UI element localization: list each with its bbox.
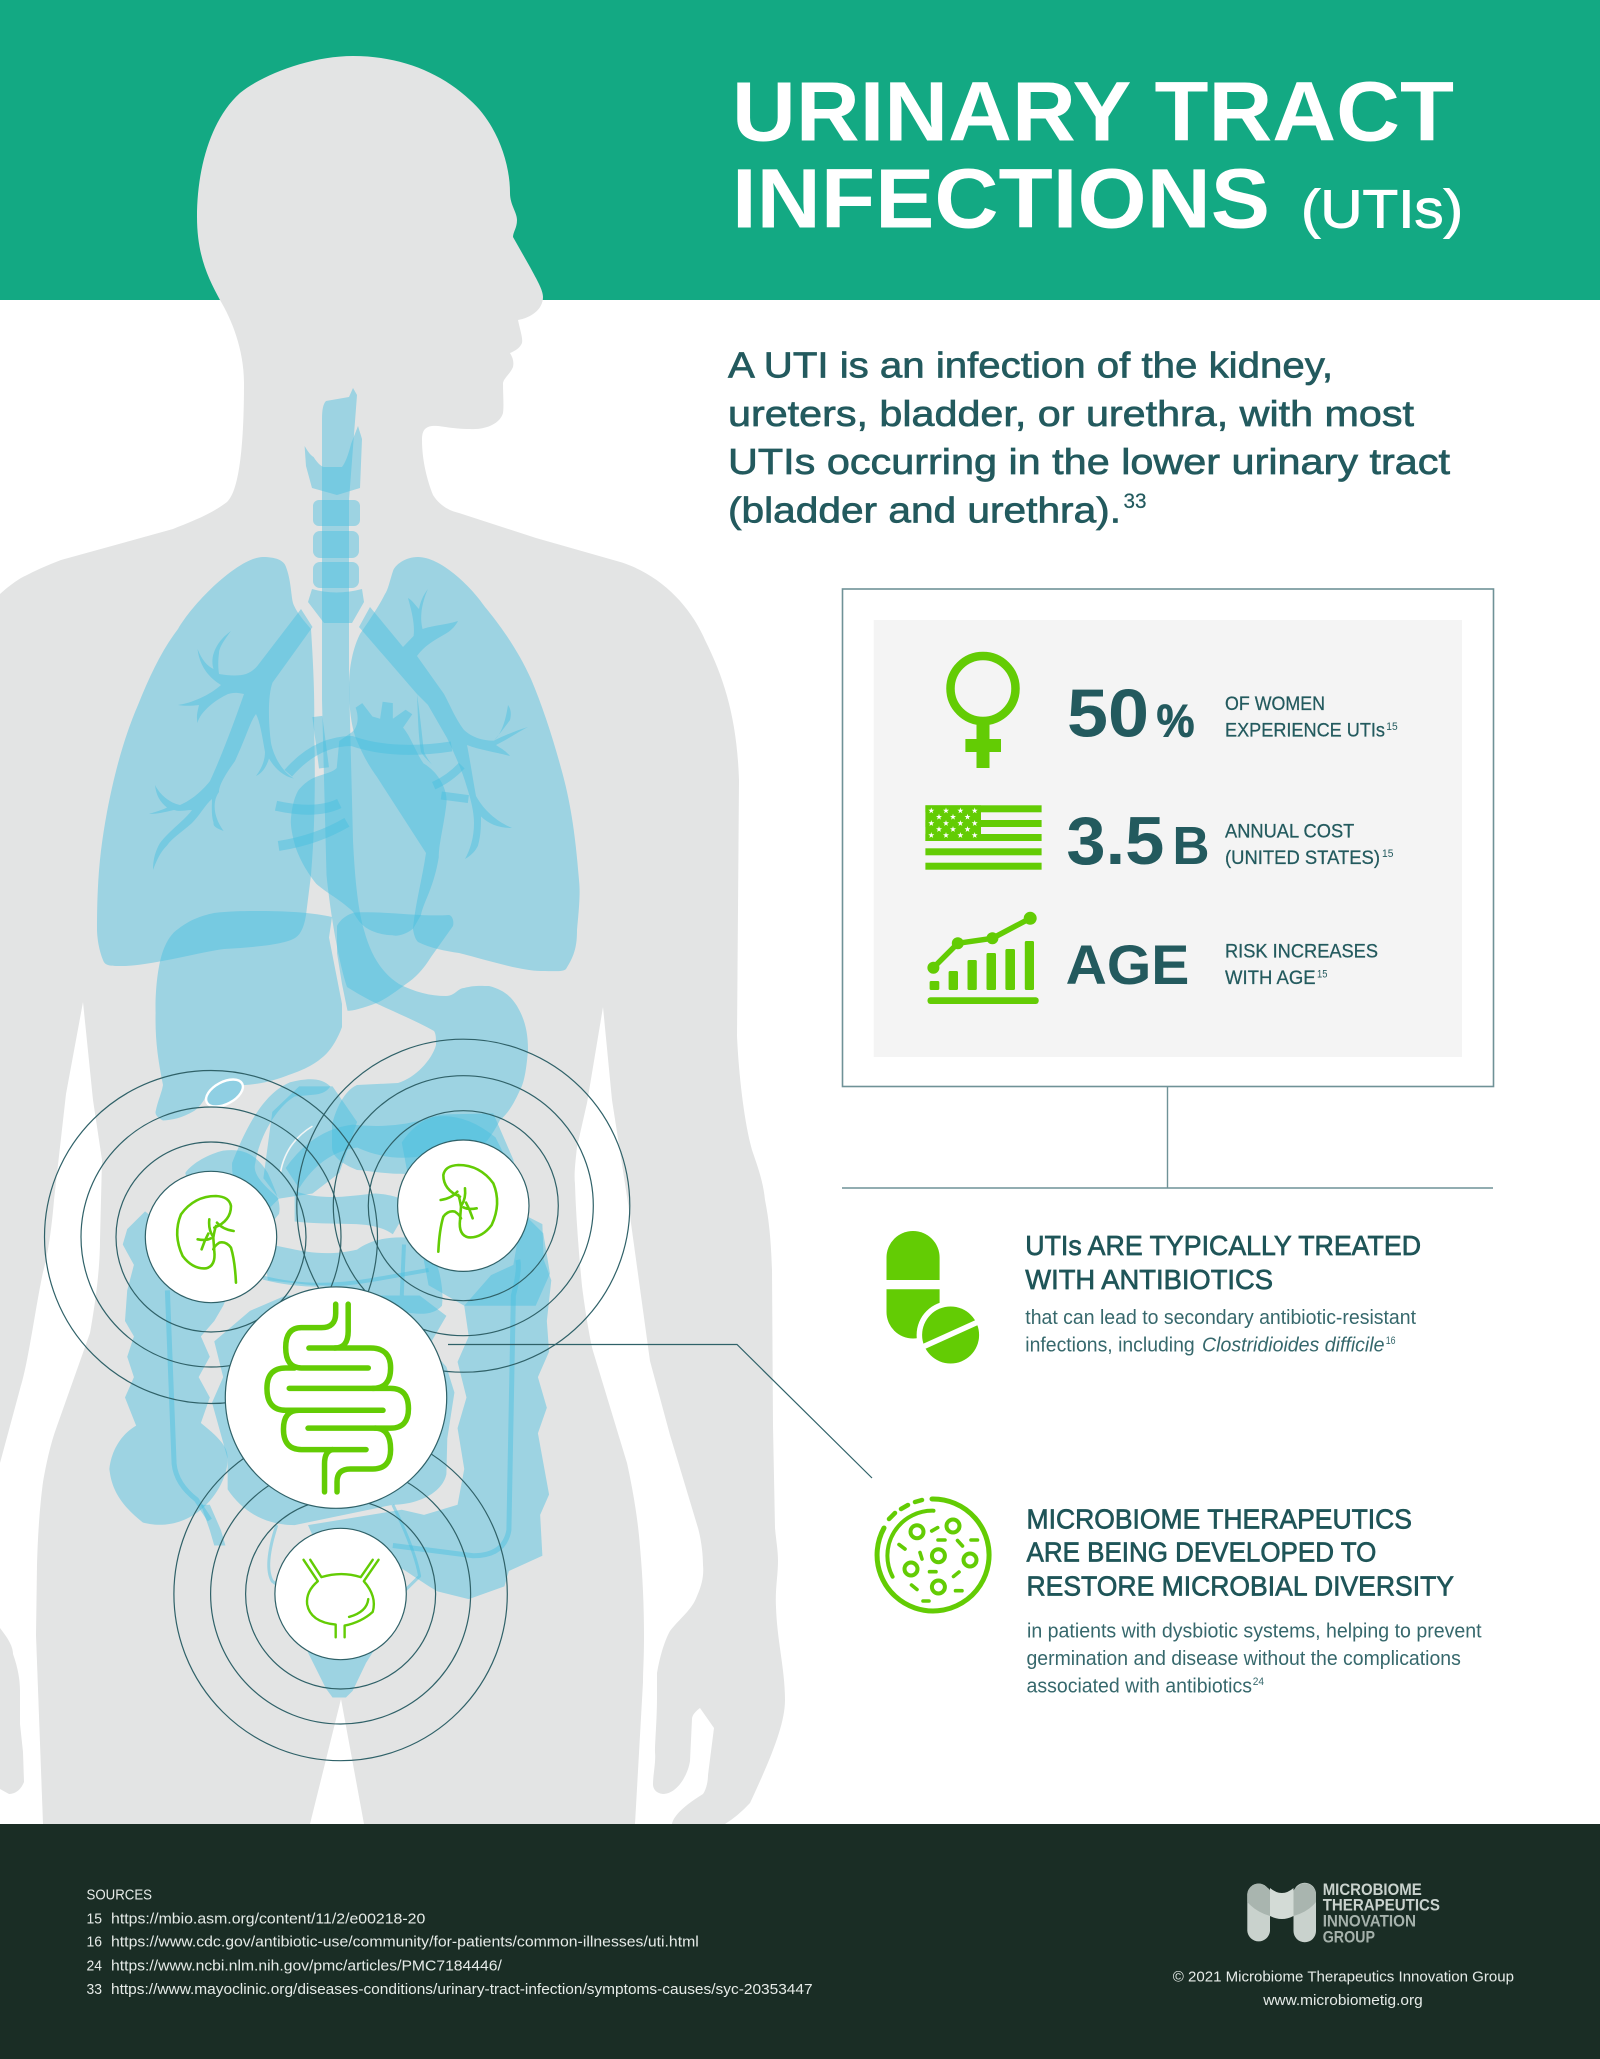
icon: bladder <box>304 1560 379 1637</box>
text: antibiotics <box>1025 1230 1421 1357</box>
inner duodenal loop <box>263 1086 357 1199</box>
stat: 3.5B: 3.5 <box>1066 803 1164 879</box>
text: antibiotics: UTIs ARE TYPICALLY TREATED <box>1025 1230 1421 1261</box>
panel: statistics <box>842 589 1494 1086</box>
website: www.microbiometig.org <box>1262 1992 1423 2009</box>
icon: intestine <box>267 1304 408 1492</box>
sources list: https://mbio.asm.org/content/11/2/e00218-20 <box>111 1910 425 1927</box>
connector line from intestine to microbiome <box>448 1344 872 1478</box>
left lung <box>97 557 315 966</box>
logo wordmark: INNOVATION <box>1323 1913 1416 1931</box>
stat: 50% <box>1067 676 1194 752</box>
panel frame <box>842 589 1494 1086</box>
label: risk increases: WITH AGE <box>1225 968 1316 989</box>
logo mark <box>1247 1883 1316 1942</box>
label: risk increases <box>1225 941 1378 989</box>
stat: AGE: AGE <box>1066 933 1189 996</box>
logo wordmark <box>1323 1881 1440 1946</box>
disc: right kidney <box>398 1140 529 1271</box>
organs: lungs, heart, digestive tract <box>97 388 580 1698</box>
intestines <box>109 1079 551 1698</box>
mesenteric vessels <box>167 1244 518 1591</box>
connector from panel to divider <box>842 1087 1493 1188</box>
sources list: SOURCES <box>86 1886 152 1903</box>
icon: pills <box>886 1231 985 1369</box>
copyright: © 2021 Microbiome Therapeutics Innovation Group <box>1173 1969 1514 1986</box>
icon: rising bar chart <box>927 912 1039 1004</box>
title <box>732 65 1463 245</box>
text: microbiome therapeutics <box>1026 1503 1482 1697</box>
text: microbiome therapeutics: MICROBIOME THERAPEUTICS <box>1026 1503 1412 1534</box>
label: risk increases: 15 <box>1317 969 1327 981</box>
pancreas <box>286 1116 513 1188</box>
left bronchi <box>149 609 312 870</box>
disc: left kidney <box>145 1171 277 1303</box>
header band <box>0 0 1600 300</box>
transverse colon <box>263 1237 442 1314</box>
small intestine <box>212 1296 454 1525</box>
text: microbiome therapeutics: RESTORE MICROBIAL DIVERSITY <box>1026 1571 1454 1602</box>
stat: 3.5B: B <box>1172 816 1210 876</box>
text: microbiome therapeutics: ARE BEING DEVELOPED TO <box>1026 1537 1376 1568</box>
heart <box>276 702 468 936</box>
sources list: 16 <box>86 1934 102 1951</box>
sources list: https://www.ncbi.nlm.nih.gov/pmc/articles/PMC7184446/ <box>111 1957 503 1974</box>
sources list <box>86 1886 813 1998</box>
right lung <box>349 557 580 971</box>
logo wordmark: GROUP <box>1323 1928 1375 1946</box>
sources list: 15 <box>86 1910 102 1927</box>
disc: bladder <box>275 1528 406 1660</box>
logo wordmark: THERAPEUTICS <box>1323 1897 1440 1915</box>
target rings and organ discs <box>44 1039 630 1761</box>
rings: right kidney <box>297 1039 630 1372</box>
descending colon <box>308 1214 551 1599</box>
splenic flexure <box>402 1113 550 1306</box>
intro paragraph: UTIs occurring in the lower urinary tract <box>728 441 1450 482</box>
logo wordmark: MICROBIOME <box>1323 1881 1422 1899</box>
sources list: 33 <box>86 1981 102 1998</box>
text: antibiotics: Clostridioides difficile <box>1202 1335 1384 1357</box>
label: of women: EXPERIENCE UTIs <box>1225 721 1385 742</box>
thyroid cartilage and tracheal rings <box>305 426 364 623</box>
right bronchi <box>359 589 528 859</box>
body silhouette <box>0 56 785 1824</box>
white arc inside duodenum <box>280 1126 312 1173</box>
label: risk increases: RISK INCREASES <box>1225 941 1378 962</box>
text: microbiome therapeutics: associated with antibiotics <box>1026 1675 1252 1697</box>
intro paragraph: ureters, bladder, or urethra, with most <box>728 393 1414 434</box>
text: antibiotics: 16 <box>1386 1335 1396 1347</box>
label: annual cost <box>1225 822 1393 869</box>
intro paragraph: 33 <box>1124 490 1146 513</box>
icon: left kidney <box>177 1196 236 1283</box>
right liver lobe <box>337 912 453 1011</box>
label: annual cost: 15 <box>1382 848 1393 860</box>
rings: bladder <box>174 1427 507 1761</box>
title: URINARY TRACT <box>732 65 1454 159</box>
footer band <box>0 1824 1600 2059</box>
stat: 50%: % <box>1156 695 1194 747</box>
gallbladder <box>202 1074 247 1112</box>
icon: microbe petri dish <box>877 1499 989 1611</box>
label: annual cost: (UNITED STATES) <box>1225 848 1380 869</box>
sources list: 24 <box>86 1957 102 1974</box>
trachea and oesophagus into stomach <box>322 388 528 1174</box>
label: of women <box>1225 694 1398 742</box>
text: antibiotics: infections, including <box>1025 1335 1195 1357</box>
title: (UTIs) <box>1301 179 1463 239</box>
text: antibiotics: that can lead to secondary antibiotic-resistant <box>1025 1307 1416 1329</box>
duodenum <box>232 1079 330 1210</box>
label: annual cost: ANNUAL COST <box>1225 822 1355 843</box>
icon: right kidney <box>438 1165 497 1252</box>
label: of women: 15 <box>1386 721 1398 733</box>
intro paragraph: A UTI is an infection of the kidney, <box>728 344 1333 385</box>
text: microbiome therapeutics: 24 <box>1253 1676 1264 1688</box>
liver <box>156 911 342 1120</box>
panel inner background <box>874 620 1462 1057</box>
disc: intestine <box>225 1287 447 1508</box>
stat: 3.5B <box>1066 803 1210 879</box>
ascending colon and cecum <box>109 1211 232 1525</box>
sources list: https://www.mayoclinic.org/diseases-conditions/urinary-tract-infection/symptoms-causes/syc-20353447 <box>111 1981 813 1998</box>
text: microbiome therapeutics: in patients with dysbiotic systems, helping to prevent <box>1027 1620 1482 1642</box>
rectum <box>306 1607 402 1698</box>
rings: left kidney <box>44 1070 378 1404</box>
appendix <box>201 1505 225 1546</box>
title: INFECTIONS <box>732 151 1270 245</box>
text: microbiome therapeutics: germination and disease without the complications <box>1026 1648 1461 1670</box>
intro paragraph: (bladder and urethra). <box>728 490 1121 531</box>
icon: female symbol <box>950 656 1016 768</box>
text: antibiotics: WITH ANTIBIOTICS <box>1025 1264 1273 1295</box>
label: of women: OF WOMEN <box>1225 694 1325 715</box>
hepatic flexure <box>185 1150 280 1250</box>
stat: 50%: 50 <box>1067 676 1149 752</box>
icon: US flag <box>925 805 1042 870</box>
sources list: https://www.cdc.gov/antibiotic-use/community/for-patients/common-illnesses/uti.html <box>111 1934 699 1951</box>
intro paragraph <box>728 344 1450 531</box>
